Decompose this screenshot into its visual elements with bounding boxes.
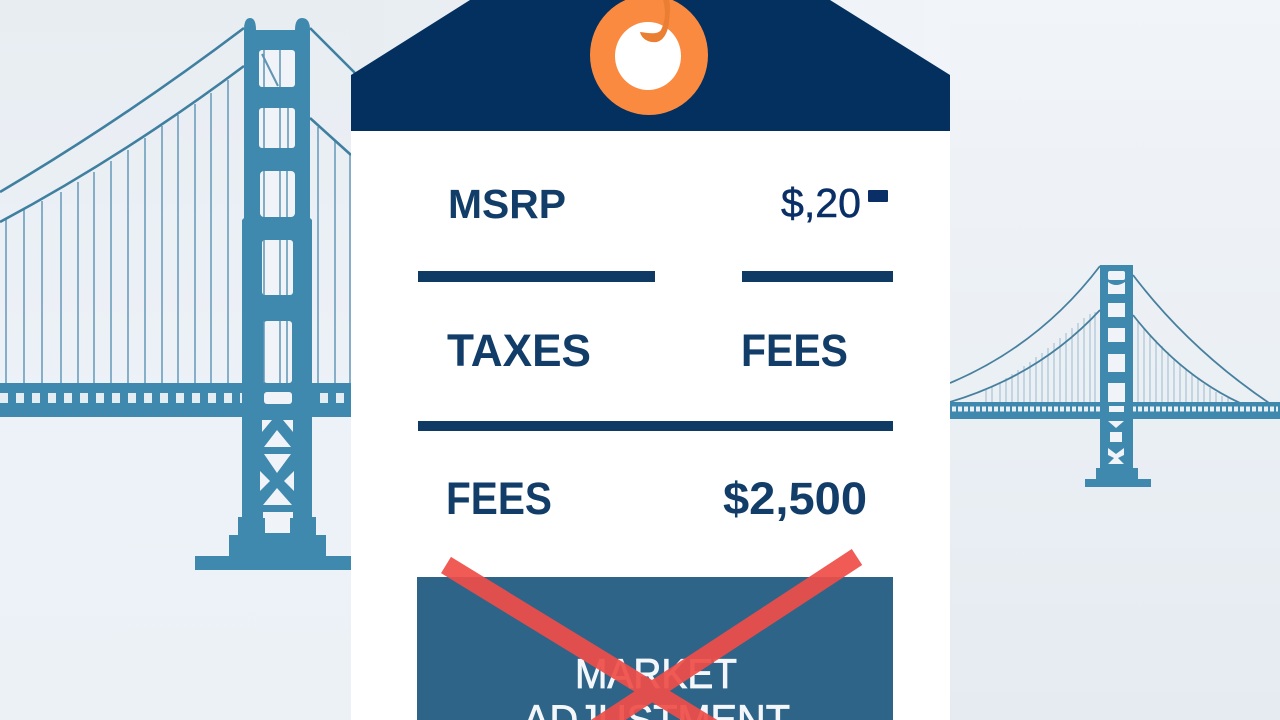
deck openings [0,393,351,403]
illustration: large bridge left [0,18,355,570]
tower windows [259,50,295,533]
panel: market adjustment box [417,577,893,720]
tag body [351,131,950,720]
bridge deck [0,383,351,417]
cables [0,28,355,222]
icon: red cross-out [446,557,857,720]
divider: MSRP left [418,271,655,282]
divider: MSRP right [742,271,893,282]
cables [950,266,1272,405]
row: taxes label: TAXES [447,325,591,376]
illustration: small bridge right [950,265,1280,487]
divider: taxes [418,421,893,431]
row: fees value: $2,500 [723,473,867,524]
window hangers [262,50,288,383]
bridge deck [950,402,1280,419]
tower [1085,265,1151,487]
row: MSRP label: MSRP [448,181,566,227]
row: MSRP value: $,20 [781,180,861,226]
icon: tag eyelet [590,0,708,115]
hangers [986,312,1228,402]
row: fees label: FEES [446,473,552,524]
row: taxes value: FEES [741,325,848,376]
deck openings [952,406,1278,412]
tower [195,18,351,570]
tag header [351,0,950,131]
panel: market adjustment box: MARKET [575,650,737,697]
panel: price tag [351,0,950,720]
tower windows [1108,271,1125,464]
hangers [6,80,350,383]
